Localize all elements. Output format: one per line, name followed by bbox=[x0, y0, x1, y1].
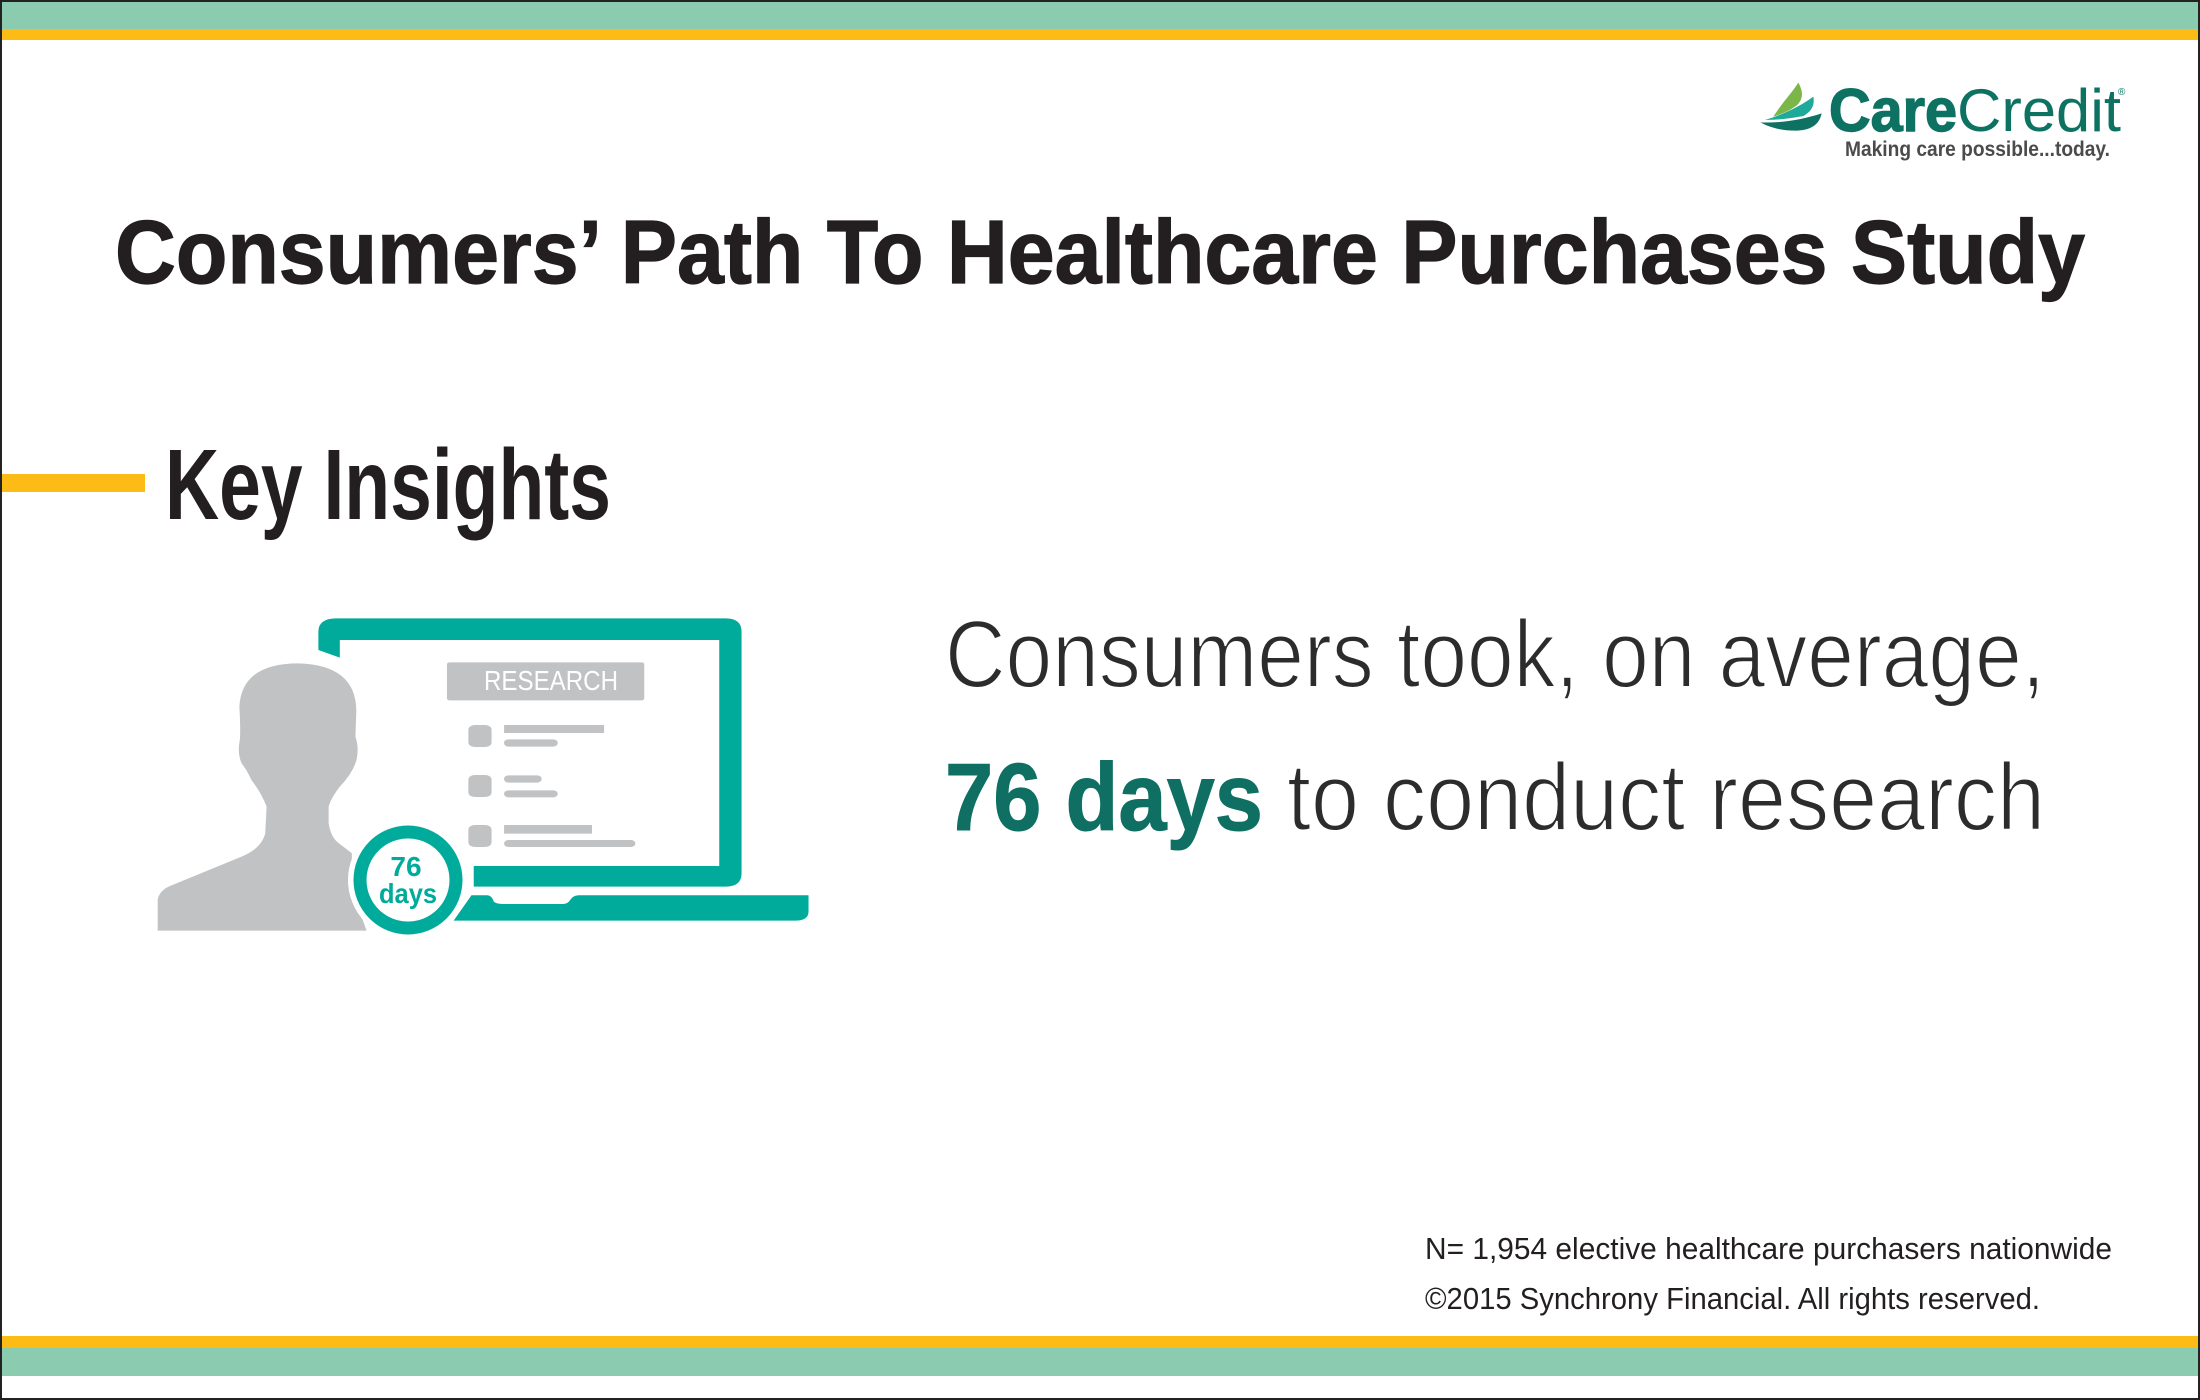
badge: 76 days bbox=[348, 820, 468, 940]
research label: RESEARCH bbox=[484, 665, 618, 696]
statement line 2: to conduct research bbox=[1287, 744, 2045, 851]
research header bbox=[447, 662, 644, 700]
statement line 1: Consumers took, on average, bbox=[945, 601, 2045, 708]
logo wordmark bbox=[1829, 77, 2121, 144]
statement highlight: 76 days: 76 days bbox=[945, 744, 1263, 851]
main statement bbox=[945, 601, 2045, 851]
laptop base bbox=[454, 895, 809, 921]
title: Consumers’ Path To Healthcare Purchases Study bbox=[115, 203, 2085, 303]
research list row 3 bbox=[468, 825, 635, 847]
copyright: ©2015 Synchrony Financial. All rights reserved. bbox=[1425, 1281, 2040, 1316]
logo wordmark: Care bbox=[1829, 77, 1957, 144]
laptop screen bbox=[318, 618, 742, 887]
sample size note: N= 1,954 elective healthcare purchasers nationwide bbox=[1425, 1231, 2112, 1266]
icon: logo leaves bbox=[1761, 83, 1822, 131]
icon: person with laptop researching bbox=[158, 618, 809, 940]
person silhouette bbox=[158, 663, 367, 931]
research list row 2 bbox=[468, 775, 558, 797]
top banner bbox=[0, 2, 2200, 40]
footnote bbox=[1425, 1231, 2112, 1316]
badge: 76 days: 76 bbox=[390, 851, 422, 882]
heading: Key Insights: Key Insights bbox=[165, 429, 611, 541]
logo wordmark: Credit bbox=[1957, 77, 2121, 144]
logo registered mark: ® bbox=[2118, 87, 2126, 98]
section marker bar bbox=[2, 474, 145, 492]
badge: 76 days: days bbox=[379, 878, 437, 909]
research list row 1 bbox=[468, 725, 604, 747]
logo: CareCredit bbox=[1761, 77, 2126, 161]
bottom banner bbox=[0, 1336, 2200, 1376]
logo tagline: Making care possible...today. bbox=[1845, 138, 2110, 161]
